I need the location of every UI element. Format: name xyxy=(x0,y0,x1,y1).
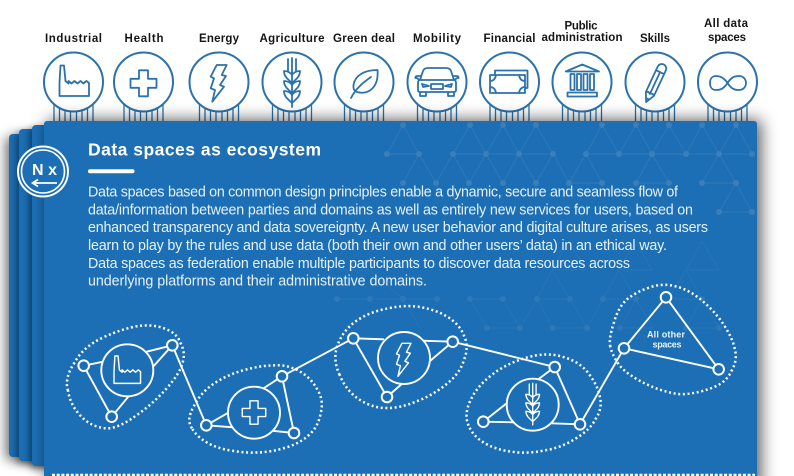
body text: learn to play by the rules and use data (both their own and other users’ data) in an ethical way. xyxy=(88,238,667,254)
cluster: industrial xyxy=(67,325,184,428)
main panel xyxy=(44,121,757,476)
body text: underlying platforms and their administrative domains. xyxy=(88,274,427,290)
tab: Mobility xyxy=(408,33,466,122)
tab: Industrial: Industrial xyxy=(45,33,102,45)
heading: Data spaces as ecosystem xyxy=(88,140,321,160)
heading underline xyxy=(88,169,134,173)
tab: All data spaces xyxy=(698,18,757,122)
tab: Financial: Financial xyxy=(484,33,536,45)
tab: Mobility: Mobility xyxy=(413,33,462,45)
tab: Green deal: Green deal xyxy=(333,33,395,45)
domain tabs row xyxy=(43,18,758,121)
cluster: agriculture xyxy=(467,354,601,453)
cluster: energy xyxy=(335,306,467,408)
cluster: all other spaces: spaces xyxy=(652,339,682,349)
tab: Public administration xyxy=(542,20,622,122)
body text xyxy=(88,185,708,290)
tab: Health: Health xyxy=(124,33,164,45)
tab: Health xyxy=(114,33,173,122)
cluster: health xyxy=(189,365,322,453)
tab: Financial xyxy=(480,33,539,122)
tab: Agriculture: Agriculture xyxy=(260,33,324,45)
tab: Agriculture xyxy=(260,33,324,122)
body text: enhanced transparency and data sovereignty. A new user behavior and digital culture arises, as users xyxy=(88,220,708,236)
cluster: all other spaces xyxy=(610,285,736,394)
tab: Public administration: Public xyxy=(564,20,598,32)
tab: Public administration: administration xyxy=(542,32,622,44)
body text: Data spaces based on common design principles enable a dynamic, secure and seamless flow of xyxy=(88,185,678,201)
tab: Energy xyxy=(190,33,248,122)
tab: Energy: Energy xyxy=(199,33,240,45)
stacked sheet: back layer 1 xyxy=(32,125,132,466)
badge: N x with arrow xyxy=(18,146,68,196)
body text: data/information between parties and domains as well as entirely new services for users, based on xyxy=(88,202,693,218)
tab: Skills xyxy=(626,33,684,122)
background triangle mesh xyxy=(334,122,755,331)
stacked sheet: back layer 3 xyxy=(9,134,109,457)
badge: N x with arrow: N x xyxy=(32,162,57,179)
network: links between clusters xyxy=(172,338,624,425)
stacked sheet: back layer 2 xyxy=(19,129,119,461)
tab: Green deal xyxy=(333,33,395,122)
cluster: all other spaces: All other xyxy=(647,330,685,340)
tab: Industrial xyxy=(44,33,103,122)
tab: Skills: Skills xyxy=(640,33,670,45)
tab: All data spaces: spaces xyxy=(708,32,746,44)
tab: All data spaces: All data xyxy=(704,18,749,30)
body text: Data spaces as federation enable multiple participants to discover data resources across xyxy=(88,256,630,272)
